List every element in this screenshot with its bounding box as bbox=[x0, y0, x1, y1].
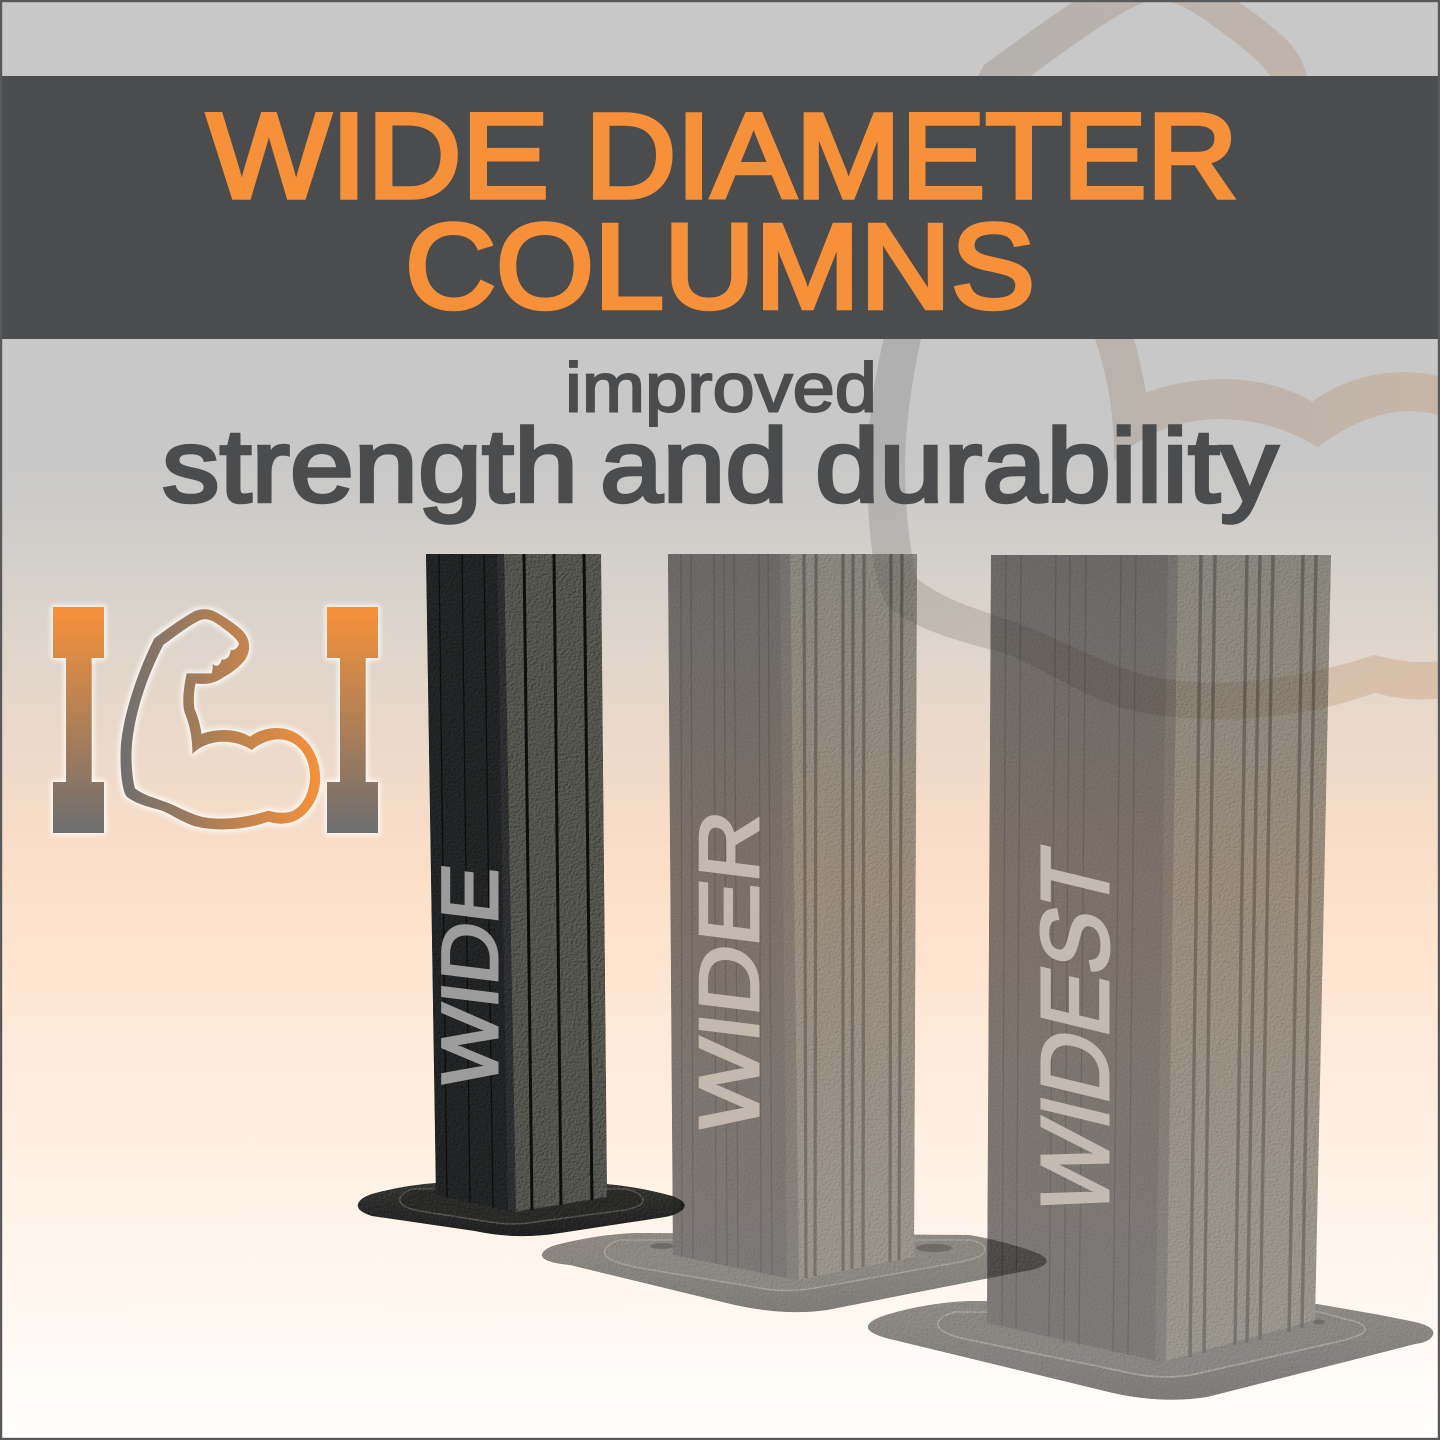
column right face: wider bbox=[787, 554, 917, 1280]
base plate: wide bbox=[358, 1183, 685, 1236]
icon: right bar bbox=[327, 607, 378, 833]
subtitle: improved bbox=[565, 349, 877, 427]
title bbox=[207, 88, 1238, 334]
subtitle: durability bbox=[815, 408, 1278, 524]
base plate: widest bbox=[868, 1301, 1433, 1400]
icon: flexed arm bbox=[121, 609, 320, 829]
column: wide bbox=[358, 554, 685, 1236]
column right face: wide bbox=[504, 554, 607, 1212]
column: widest bbox=[868, 555, 1433, 1400]
column left face: widest bbox=[987, 555, 1175, 1362]
base plate: wider bbox=[542, 1233, 1047, 1312]
subtitle: strength bbox=[162, 408, 578, 524]
title: DIAMETER bbox=[585, 88, 1238, 224]
column right face: widest bbox=[1162, 555, 1331, 1362]
subtitle bbox=[162, 349, 1278, 524]
title banner bbox=[0, 76, 1440, 339]
label: WIDER: WIDER bbox=[682, 806, 776, 1137]
label: WIDE: WIDE bbox=[425, 860, 514, 1092]
title: COLUMNS bbox=[405, 198, 1035, 334]
column left face: wide bbox=[426, 554, 514, 1212]
watermark: large flexed arm bbox=[867, 0, 1440, 719]
title: WIDE bbox=[207, 88, 549, 224]
label: WIDEST: WIDEST bbox=[1021, 839, 1129, 1225]
column: wider bbox=[542, 554, 1047, 1312]
icon: strength arm between dumbbell bars bbox=[53, 607, 378, 833]
column left face: wider bbox=[668, 554, 797, 1280]
subtitle: and bbox=[600, 408, 788, 524]
icon: left bar bbox=[53, 607, 104, 833]
